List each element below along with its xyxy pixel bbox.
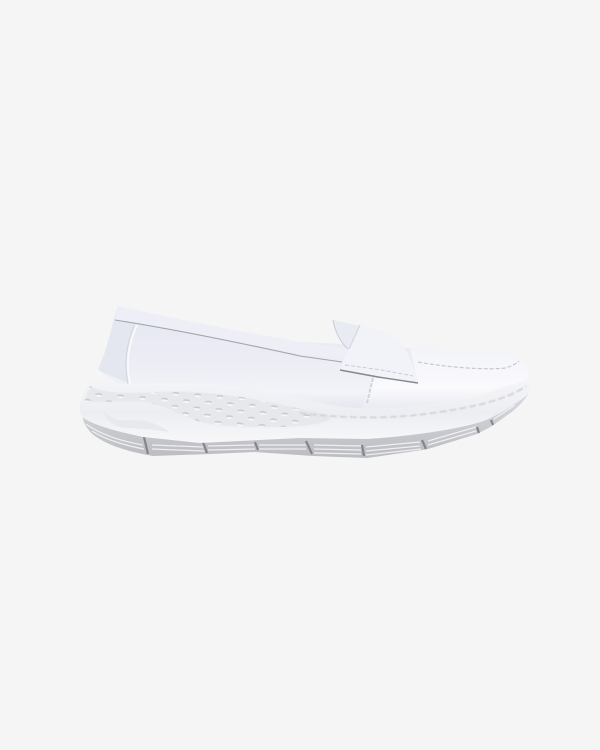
midsole stitch ridge	[300, 386, 526, 417]
upper	[98, 306, 529, 415]
toe box light area	[360, 348, 529, 415]
perforated pocket	[84, 386, 331, 427]
heel swoosh	[104, 410, 170, 432]
vamp apron stitching	[418, 361, 519, 369]
heel counter shading	[98, 320, 137, 384]
outsole with tread	[82, 386, 531, 458]
collar band	[115, 306, 347, 358]
collar line	[115, 320, 342, 362]
tread ribs	[86, 405, 515, 455]
centre seam	[367, 378, 373, 403]
midsole	[79, 368, 531, 443]
penny strap	[333, 320, 418, 383]
shoe	[79, 306, 531, 458]
tread grooves	[144, 420, 493, 456]
heel seam	[128, 325, 137, 384]
